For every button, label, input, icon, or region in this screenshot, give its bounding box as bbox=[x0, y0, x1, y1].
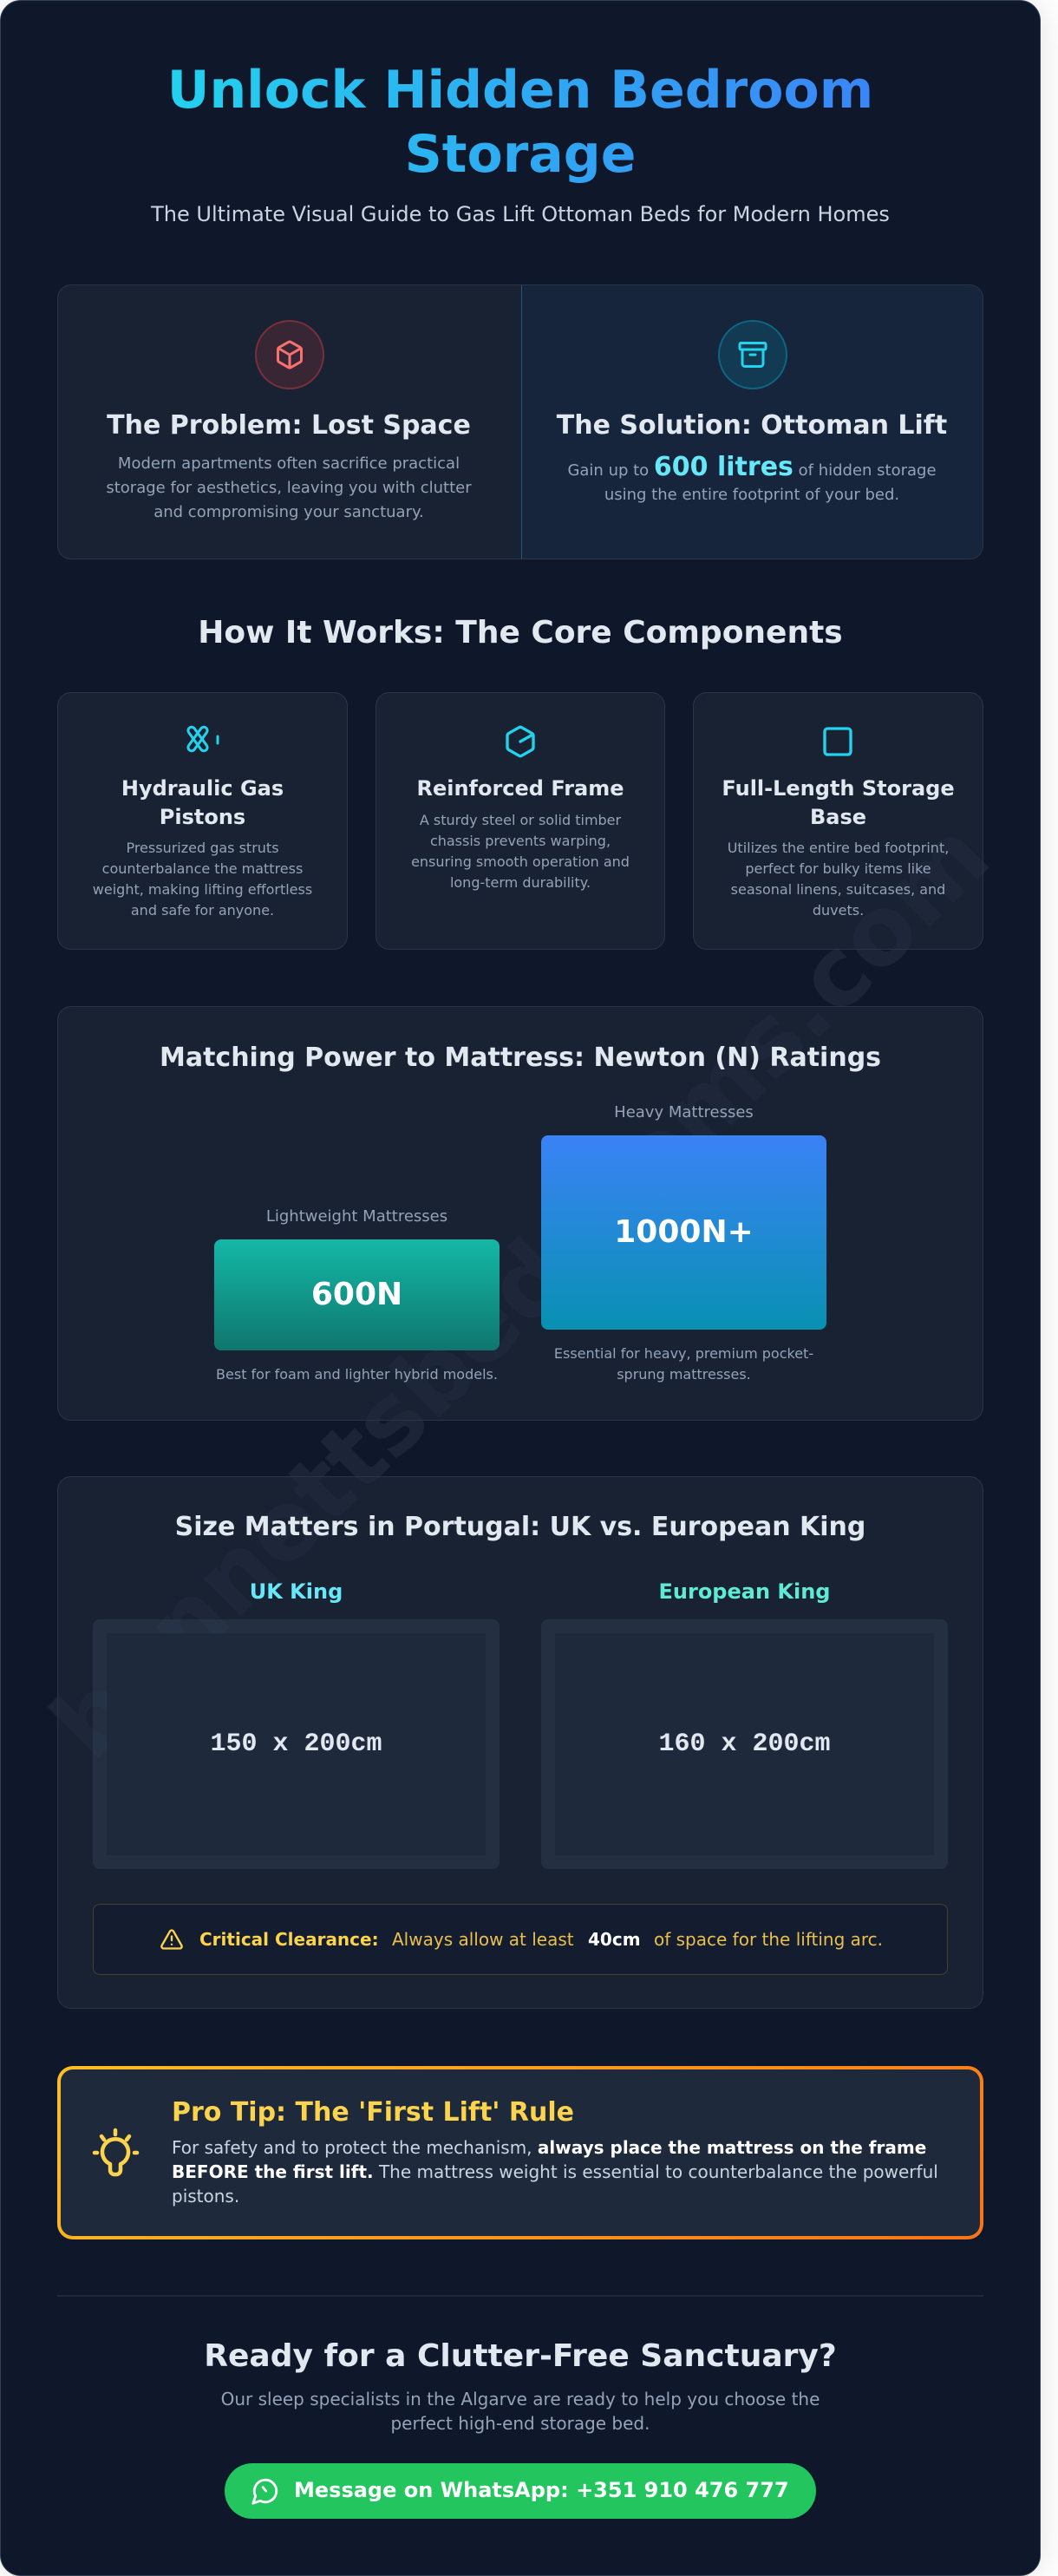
pistons heading: Pistons bbox=[160, 805, 245, 829]
problem text: Modern apartments often sacrifice practical bbox=[118, 454, 460, 473]
frame text: chassis prevents warping, bbox=[430, 833, 611, 849]
panel: size comparison bbox=[57, 1476, 983, 2009]
icon: warning bbox=[160, 1929, 183, 1950]
icon: WhatsApp bbox=[251, 2479, 278, 2505]
pro tip text: For safety and to protect the mechanism, always place the mattress on the frame bbox=[172, 2137, 926, 2158]
CTA text: perfect high-end storage bed. bbox=[390, 2413, 650, 2434]
divider bbox=[57, 2295, 983, 2297]
solution text: using the entire footprint of your bed. bbox=[604, 486, 899, 504]
pistons text: and safe for anyone. bbox=[131, 902, 274, 919]
pistons text bbox=[93, 840, 312, 919]
storage text: Utilizes the entire bed footprint, bbox=[728, 840, 949, 856]
label: European King: European King bbox=[659, 1579, 831, 1604]
frame text bbox=[411, 812, 630, 891]
label: lightweight: Lightweight Mattresses bbox=[266, 1207, 447, 1226]
solution heading: The Solution: Ottoman Lift bbox=[557, 410, 947, 441]
pro tip heading: Pro Tip: The 'First Lift' Rule bbox=[172, 2097, 574, 2128]
panel: problem and solution bbox=[57, 284, 983, 559]
pistons text: Pressurized gas struts bbox=[126, 840, 279, 856]
storage text bbox=[728, 840, 949, 919]
storage heading: Base bbox=[810, 805, 866, 829]
card: frame bbox=[376, 692, 665, 950]
subtitle: The Ultimate Visual Guide to Gas Lift Ottoman Beds for Modern Homes bbox=[151, 202, 890, 226]
clearance label: Critical Clearance: bbox=[199, 1929, 379, 1950]
size heading: Size Matters in Portugal: UK vs. European King bbox=[175, 1512, 865, 1542]
frame text: ensuring smooth operation and bbox=[411, 853, 630, 870]
bar: 1000N+ bbox=[541, 1135, 826, 1330]
problem text: storage for aesthetics, leaving you with clutter bbox=[106, 479, 472, 497]
pistons text: counterbalance the mattress bbox=[102, 860, 303, 877]
frame heading: Reinforced Frame bbox=[416, 776, 624, 801]
label: heavy: Heavy Mattresses bbox=[614, 1103, 754, 1121]
storage heading: Full-Length Storage bbox=[722, 776, 955, 801]
solution text bbox=[567, 452, 937, 504]
icon: problem box bbox=[255, 320, 324, 389]
problem text: and compromising your sanctuary. bbox=[153, 503, 424, 521]
pistons heading bbox=[121, 776, 284, 829]
note: heavy bbox=[554, 1345, 813, 1383]
solution text: Gain up to 600 litres of hidden storage bbox=[567, 452, 937, 482]
callout: critical clearance bbox=[93, 1904, 948, 1975]
card: pistons bbox=[57, 692, 348, 950]
clearance value: 40cm bbox=[588, 1929, 641, 1950]
pro tip interior bbox=[61, 2069, 980, 2236]
bed: UK King bbox=[93, 1619, 500, 1869]
CTA text: Our sleep specialists in the Algarve are ready to help you choose the bbox=[221, 2389, 820, 2409]
title: Unlock Hidden Bedroom bbox=[167, 60, 873, 121]
card: storage base bbox=[693, 692, 983, 950]
note: heavy: Essential for heavy, premium pocket- bbox=[554, 1345, 813, 1362]
pistons text: weight, making lifting effortless bbox=[93, 881, 312, 898]
clearance text 1: Always allow at least bbox=[392, 1929, 574, 1950]
storage text: duvets. bbox=[813, 902, 864, 919]
CTA heading: Ready for a Clutter-Free Sanctuary? bbox=[204, 2338, 837, 2374]
CTA text bbox=[221, 2389, 820, 2434]
button: WhatsApp bbox=[225, 2463, 816, 2519]
frame text: long-term durability. bbox=[450, 874, 591, 891]
problem text bbox=[106, 454, 472, 521]
watermark: bennettsbedrooms.com bbox=[30, 800, 1010, 1780]
icon: lightbulb bbox=[92, 2128, 139, 2177]
section heading: how it works: How It Works: The Core Components bbox=[198, 615, 843, 651]
frame text: A sturdy steel or solid timber bbox=[420, 812, 621, 828]
label: UK King: UK King bbox=[250, 1579, 343, 1604]
button text: Message on WhatsApp: +351 910 476 777 bbox=[294, 2478, 789, 2502]
note: heavy: sprung mattresses. bbox=[617, 1366, 751, 1383]
bar: 600N: 600N bbox=[311, 1277, 402, 1312]
bar: 600N bbox=[214, 1239, 500, 1350]
pistons heading: Hydraulic Gas bbox=[121, 776, 284, 801]
panel: newton ratings bbox=[57, 1006, 983, 1421]
title bbox=[156, 58, 885, 186]
bed: European King bbox=[541, 1619, 948, 1869]
ratings heading: Matching Power to Mattress: Newton (N) Ratings bbox=[160, 1043, 881, 1073]
bar: 1000N+: 1000N+ bbox=[614, 1214, 754, 1250]
storage text: seasonal linens, suitcases, and bbox=[731, 881, 945, 898]
dimensions: European: 160 x 200cm bbox=[658, 1729, 831, 1759]
pro tip text: BEFORE the first lift. The mattress weight is essential to counterbalance the powerful bbox=[172, 2161, 938, 2182]
icon: pistons bbox=[186, 725, 219, 753]
icon: frame bbox=[506, 725, 535, 758]
icon: solution archive bbox=[718, 320, 787, 389]
storage text: perfect for bulky items like bbox=[745, 860, 931, 877]
clearance text 2: of space for the lifting arc. bbox=[654, 1929, 883, 1950]
pro tip text: pistons. bbox=[172, 2186, 239, 2207]
title: Storage bbox=[405, 124, 636, 185]
icon: storage base bbox=[823, 727, 852, 756]
dimensions: UK: 150 x 200cm bbox=[210, 1729, 382, 1759]
note: lightweight: Best for foam and lighter hybrid models. bbox=[216, 1366, 498, 1383]
solution background bbox=[521, 285, 984, 560]
problem heading: The Problem: Lost Space bbox=[107, 410, 471, 441]
pro tip text bbox=[172, 2137, 938, 2207]
storage heading bbox=[722, 776, 955, 829]
panel: pro tip bbox=[57, 2066, 983, 2239]
